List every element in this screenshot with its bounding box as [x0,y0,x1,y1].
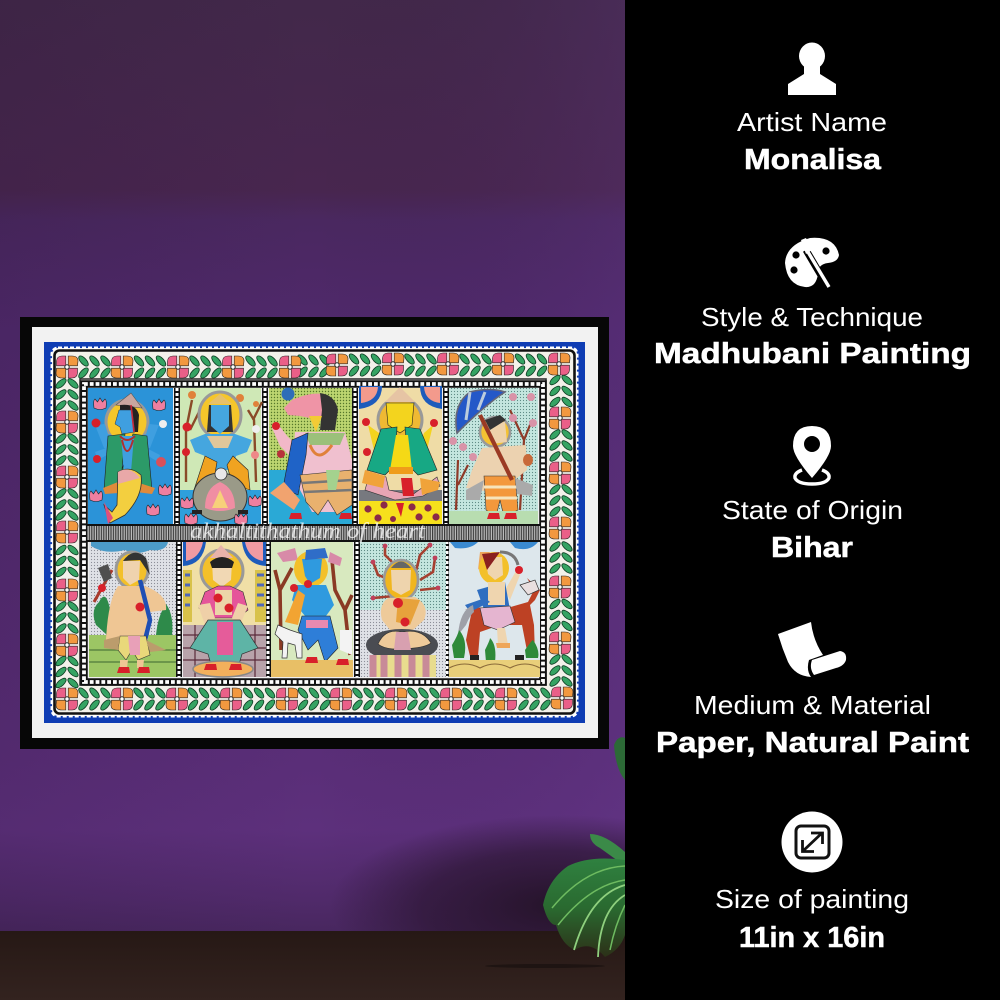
tree right [332,560,352,655]
block: size [715,812,909,954]
bushes [94,597,172,635]
plant [485,737,625,968]
head [485,557,503,580]
inner dotted band [80,379,546,685]
watermark: akhaltithathum of heart [190,518,426,543]
trees [186,400,262,482]
lotuses [94,398,106,410]
arches [183,542,266,566]
panel: Narasimha, lion avatar [359,386,442,524]
dhoti [298,616,338,662]
clouds [91,542,168,553]
yellow face [386,403,414,433]
plinth [193,661,253,677]
panel: Rama, with arrows [183,542,266,677]
halo [384,560,418,600]
block: style [654,238,971,370]
horse [465,578,540,656]
value: Bihar: Bihar [771,532,853,564]
dark disc [366,629,438,661]
border: flowers [56,353,573,710]
ground [449,660,540,677]
yellow base with dots [359,501,442,524]
body [293,432,352,512]
halo [116,552,148,588]
torso [292,585,334,616]
hands [92,418,100,428]
grey platform [359,490,442,503]
face [486,422,507,444]
fish tail [104,469,141,523]
label: style and technique: Style & Technique [701,302,923,332]
legs [194,456,250,490]
jacket [367,427,437,475]
tree branches [373,545,438,598]
floor / table [0,931,625,1000]
tree left [275,568,292,650]
raised arm [505,571,520,600]
block: origin [722,426,903,564]
block: medium [656,622,970,759]
dhoti orange stripes [484,476,518,517]
brick floor [183,625,266,677]
arm with reins [465,598,490,612]
dhoti hem [103,482,155,494]
water pot [523,454,533,466]
label: medium and material: Medium & Material [694,690,931,720]
label: size of painting: Size of painting [715,884,909,914]
panel: Kurma, turtle avatar [180,388,262,524]
necklace [305,433,345,445]
dhoti [190,620,258,668]
blouse [199,586,248,618]
pillars [183,570,266,622]
icon: paper scroll [778,622,846,677]
torso [466,445,527,492]
panel: Krishna, with flute [271,542,353,677]
scarf orange [285,590,305,625]
head [211,405,229,434]
halo [201,550,243,592]
ground [271,660,353,677]
rider torso [477,582,510,612]
halo [479,552,509,584]
panel: Parashurama, with axe [89,542,176,677]
scarf end [270,482,300,510]
body [190,434,252,470]
horse tail [458,605,474,635]
bushes [452,630,538,662]
torso [106,586,166,640]
arms [95,424,159,450]
value: Madhubani Painting: Madhubani Painting [654,338,971,370]
icon: resize arrows in circle [782,812,842,872]
block: artist [737,42,887,176]
painting border: cream band [52,348,577,716]
dhoti [365,472,440,500]
torso and arms [381,597,426,630]
umbrella [456,390,505,433]
value: Monalisa: Monalisa [744,144,882,176]
corner lotus arches [359,386,442,409]
stick [480,415,512,480]
hair [207,405,233,432]
head [123,561,140,585]
torso [390,435,412,470]
crown [116,393,142,408]
panel: Vamana, dwarf with umbrella [449,388,538,524]
picture frame [20,317,609,749]
value: 11in x 16in: 11in x 16in [739,922,885,954]
halo [294,551,328,587]
dhoti [300,470,352,515]
turtle [193,473,247,521]
column dividers [177,388,447,677]
globe [282,388,294,400]
arms hands [182,422,192,432]
sacred thread [140,580,150,640]
trees [456,410,530,510]
boar head [284,394,330,420]
ground [449,511,538,524]
scarf ends [466,478,533,500]
icon: location pin [793,426,831,484]
arms [368,425,433,450]
head [302,559,322,584]
halo [480,417,510,447]
wall background [0,0,790,1000]
border: leaf pairs, left [54,377,80,689]
flute hand [290,584,298,592]
crossed legs [378,631,431,649]
axe [94,570,112,602]
head [391,570,411,595]
border: leaf pairs, right [548,374,574,688]
dhoti [118,636,150,660]
hair [120,405,139,432]
panel: Kalki, on horse [449,542,540,677]
head [212,562,232,587]
label: state of origin: State of Origin [722,495,903,525]
grey band between rows [87,524,540,542]
jacket [104,434,152,490]
halo [106,400,148,444]
cow [275,625,302,658]
panel: Varaha, boar avatar [269,388,352,524]
blue scarf [283,433,308,495]
halo [199,392,241,438]
panel: Buddha, seated under tree [360,542,446,677]
border: leaf pairs, top [77,352,548,380]
face [115,410,135,434]
icon: person [788,42,836,95]
flag and sword [478,552,490,570]
ground [89,635,176,677]
feet [289,513,302,519]
rider lower [480,606,515,630]
sidebar panel [625,0,1000,1000]
halo [378,398,422,442]
icon: palette and brush [785,238,839,289]
value: paper, natural paint: Paper, Natural Paint [656,727,970,759]
label: artist name: Artist Name [737,107,887,137]
panel: Matsya, fish avatar [88,388,173,524]
border: leaf pairs, bottom [77,686,552,712]
pedestal [370,655,436,677]
